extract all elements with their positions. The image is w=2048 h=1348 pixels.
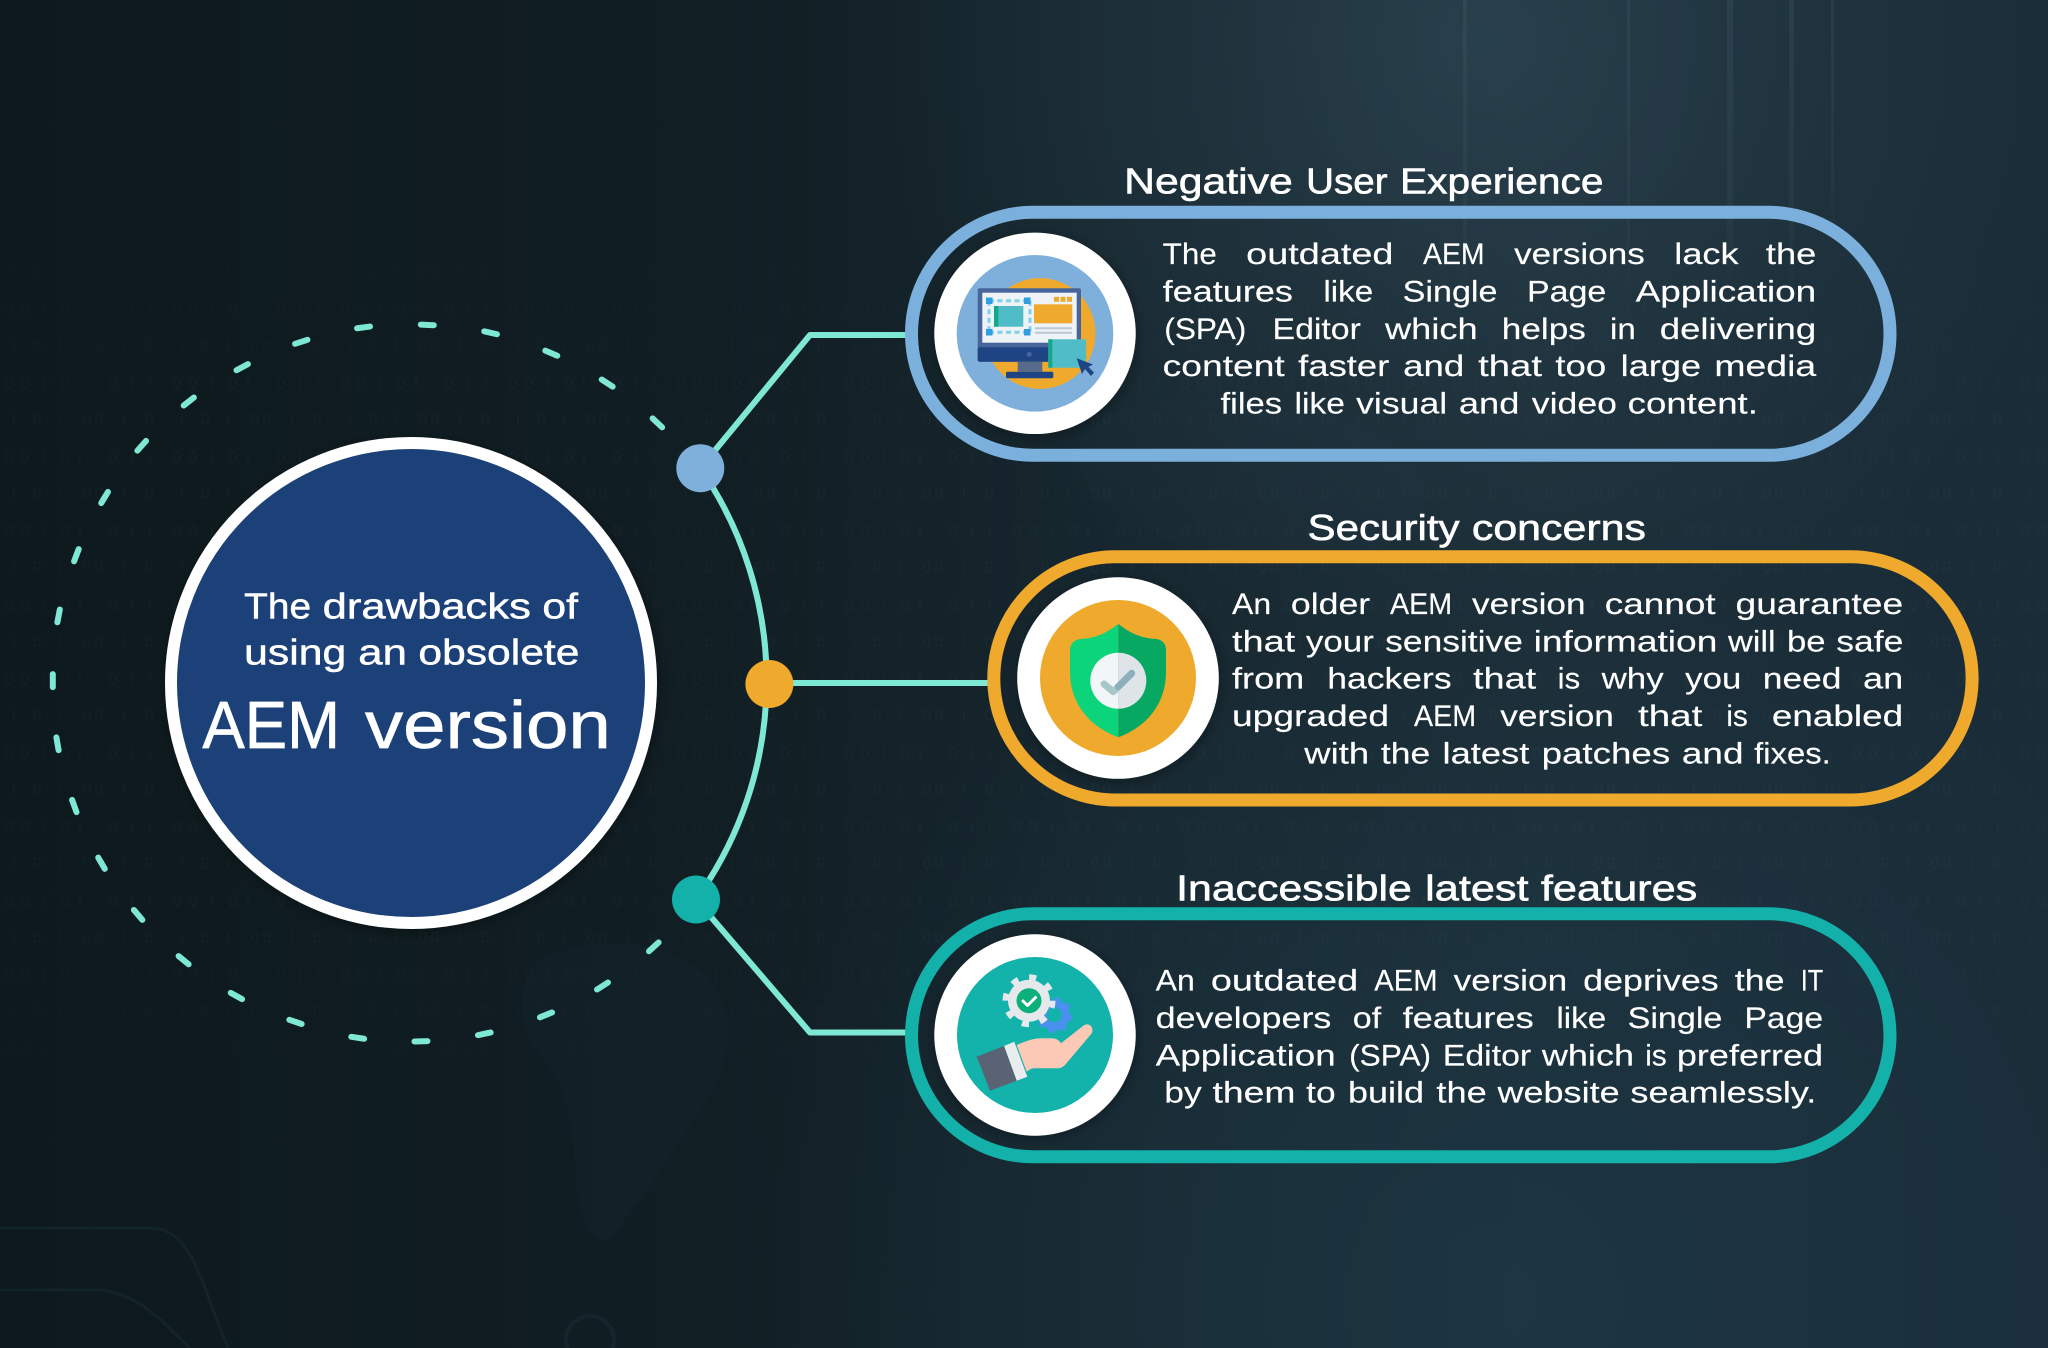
pill outline: orange [994, 557, 1972, 800]
heading: Security concerns: Security [1308, 507, 1460, 548]
heading: Inaccessible latest features: Inaccessible [1176, 868, 1412, 909]
description text: seamlessly. [1630, 1077, 1816, 1110]
description text: which [1384, 313, 1478, 346]
node dot: blue [676, 444, 724, 492]
description text: guarantee [1736, 588, 1903, 621]
description text: an [1863, 663, 1903, 696]
description text: that [1478, 350, 1543, 383]
description text: media [1714, 350, 1817, 383]
description text: you [1685, 663, 1741, 696]
heading: Negative User Experience: Negative [1124, 160, 1293, 201]
description text: the [1436, 1077, 1487, 1110]
description text: Editor [1443, 1039, 1531, 1072]
description text: which [1541, 1039, 1634, 1072]
node dot: teal [672, 876, 720, 924]
pill outline: blue [912, 212, 1890, 455]
description text: latest [1442, 737, 1530, 770]
description text: with [1303, 737, 1369, 770]
description text: deprives [1583, 965, 1719, 998]
description text: older [1291, 588, 1370, 621]
description text: video [1532, 387, 1617, 420]
icon: computer monitor with cursor [934, 233, 1136, 434]
description text: enabled [1772, 700, 1903, 733]
description text: AEM [1374, 965, 1438, 998]
central title text: obsolete [418, 632, 579, 673]
description text: that [1638, 700, 1703, 733]
heading: Inaccessible latest features: features [1541, 868, 1697, 909]
description text: cannot [1605, 588, 1717, 621]
description text: the [1735, 965, 1785, 998]
description text: faster [1298, 350, 1389, 383]
description text: AEM [1414, 700, 1476, 733]
heading: Negative User Experience: User [1306, 160, 1388, 201]
icon: hand holding gears [934, 934, 1136, 1136]
description text: by [1164, 1077, 1202, 1110]
description text: features [1163, 276, 1293, 308]
description text: large [1621, 350, 1701, 383]
description text: your [1306, 625, 1374, 658]
description text: The [1163, 238, 1217, 271]
central title text: using [244, 632, 346, 673]
description text: is [1558, 663, 1580, 696]
description text: Application [1636, 276, 1816, 308]
description text: them [1212, 1077, 1296, 1110]
description text: An [1156, 965, 1195, 998]
description text: in [1610, 313, 1636, 346]
description text: be [1787, 625, 1826, 658]
description text [1156, 965, 1823, 1110]
description text: Application [1156, 1039, 1336, 1072]
description text: need [1763, 663, 1842, 696]
description text: Page [1527, 276, 1606, 308]
central title text: an [358, 632, 407, 673]
description text: delivering [1660, 313, 1816, 346]
description text: Single [1628, 1002, 1722, 1035]
description text: to [1306, 1077, 1336, 1110]
description text: too [1555, 350, 1606, 383]
description text: and [1459, 387, 1519, 420]
description text: of [1353, 1002, 1382, 1035]
heading: Negative User Experience: Experience [1400, 160, 1604, 201]
description text: Page [1744, 1002, 1823, 1035]
description text: AEM [1390, 588, 1452, 621]
icon: security shield with check [1017, 577, 1219, 779]
description text: Editor [1272, 313, 1361, 346]
central title text [202, 585, 611, 763]
description text: versions [1514, 238, 1645, 271]
description text [1163, 238, 1817, 420]
description text: sensitive [1385, 625, 1523, 658]
description text: AEM [1423, 238, 1485, 271]
description text: upgraded [1232, 700, 1389, 733]
description text: is [1645, 1039, 1667, 1072]
description text: like [1323, 276, 1373, 308]
panel: Negative User Experience [912, 160, 1890, 455]
connector arc and branch lines [696, 335, 990, 1032]
decorative dashed ring around the central circle [53, 325, 662, 1041]
pill outline: teal [912, 914, 1890, 1157]
panel: Security concerns [994, 507, 1972, 800]
description text: version [1500, 700, 1614, 733]
description text: developers [1156, 1002, 1331, 1035]
heading: Inaccessible latest features: latest [1425, 868, 1529, 909]
description text: (SPA) [1349, 1039, 1431, 1072]
central title text: drawbacks [323, 585, 531, 626]
description text: outdated [1211, 965, 1358, 998]
description text: and [1403, 350, 1464, 383]
description text: build [1348, 1077, 1424, 1110]
central circle with title [171, 443, 651, 923]
description text: fixes. [1754, 737, 1831, 770]
description text: outdated [1246, 238, 1394, 271]
description text: from [1232, 663, 1304, 696]
description text: (SPA) [1164, 313, 1246, 346]
description text: like [1294, 387, 1345, 420]
description text: hackers [1327, 663, 1452, 696]
node dot: orange [745, 660, 793, 708]
heading: Security concerns: concerns [1472, 507, 1646, 548]
description text: and [1682, 737, 1744, 770]
panel: Inaccessible latest features [912, 868, 1890, 1157]
description text: lack [1674, 238, 1740, 271]
description text: website [1496, 1077, 1620, 1110]
description text: the [1381, 737, 1430, 770]
central title text: The [244, 585, 311, 626]
central title text: version [365, 688, 611, 763]
description text: version [1454, 965, 1567, 998]
description text: that [1473, 663, 1537, 696]
description text: like [1556, 1002, 1606, 1035]
description text: content [1163, 350, 1286, 383]
central title text: AEM [202, 688, 340, 763]
description text: that [1232, 625, 1296, 658]
description text: the [1766, 238, 1816, 271]
description text: Single [1403, 276, 1498, 308]
description text: information [1534, 625, 1717, 658]
description text: files [1220, 387, 1282, 420]
central title text: of [542, 585, 579, 626]
description text: version [1472, 588, 1586, 621]
description text [1232, 588, 1903, 770]
description text: will [1727, 625, 1776, 658]
description text: safe [1836, 625, 1903, 658]
description text: patches [1542, 737, 1670, 770]
description text: content. [1628, 387, 1758, 420]
description text: An [1232, 588, 1271, 621]
description text: helps [1502, 313, 1586, 346]
description text: preferred [1677, 1039, 1823, 1072]
description text: features [1403, 1002, 1534, 1035]
description text: visual [1356, 387, 1447, 420]
description text: is [1726, 700, 1748, 733]
description text: IT [1801, 965, 1823, 998]
description text: why [1600, 663, 1664, 696]
